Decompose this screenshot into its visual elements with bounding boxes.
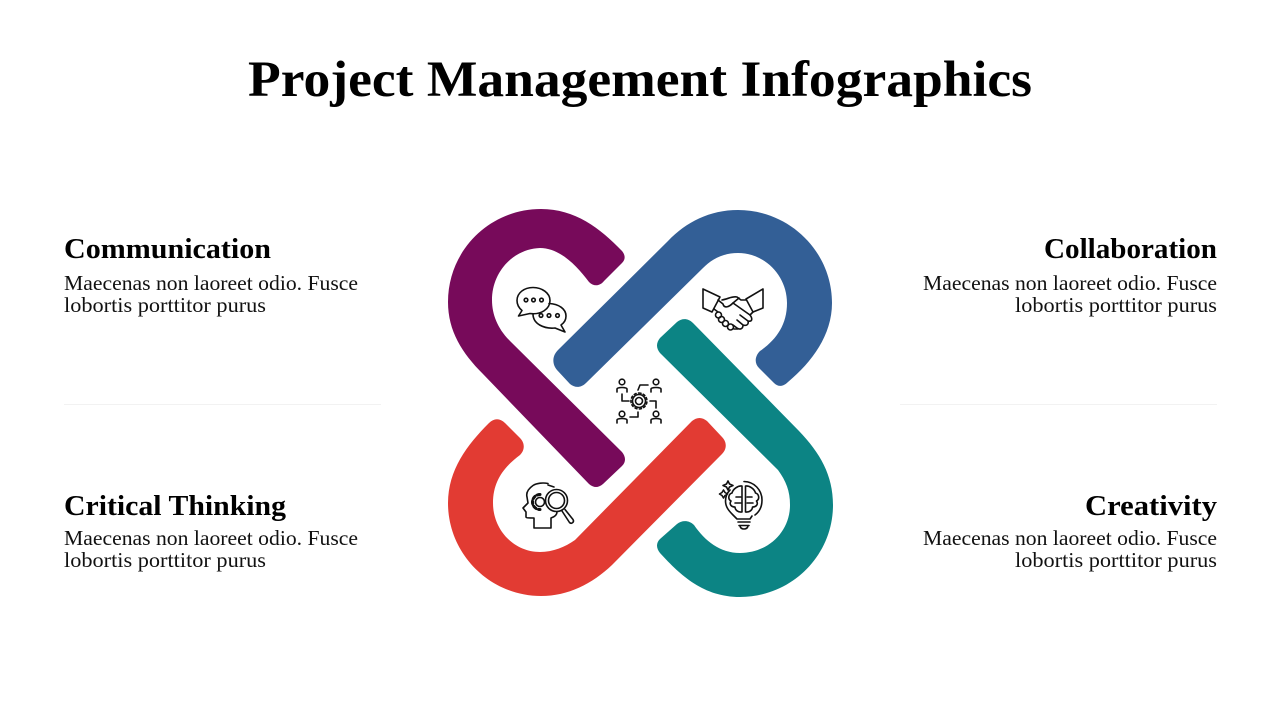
panel: critical thinking text [64, 491, 358, 572]
panel: communication text [64, 234, 358, 317]
heading: collaboration: Collaboration [1044, 234, 1217, 265]
text: creativity body: lobortis porttitor purus [1015, 548, 1217, 572]
heading: critical thinking: Critical Thinking [64, 491, 286, 522]
text: collaboration body: Maecenas non laoreet odio. Fusce [923, 271, 1217, 295]
knot: red link [448, 418, 726, 596]
panel: collaboration text [923, 234, 1217, 317]
icon: head with gear and magnifier [523, 483, 573, 528]
icon: chat bubbles [517, 288, 566, 332]
knot: purple link [448, 209, 625, 487]
text: critical thinking body [64, 526, 358, 572]
text: collaboration body: lobortis porttitor purus [1015, 293, 1217, 317]
panel: creativity text [923, 491, 1217, 572]
knot: blue link [553, 210, 832, 387]
text: communication body [64, 271, 358, 317]
text: collaboration body [923, 271, 1217, 317]
text: critical thinking body: lobortis porttitor purus [64, 548, 266, 572]
text: creativity body: Maecenas non laoreet odio. Fusce [923, 526, 1217, 550]
text: communication body: Maecenas non laoreet odio. Fusce [64, 271, 358, 295]
icon: brain light bulb [720, 481, 762, 529]
knot: teal link [657, 319, 833, 597]
text: communication body: lobortis porttitor purus [64, 293, 266, 317]
text: creativity body [923, 526, 1217, 572]
icon: handshake [703, 289, 763, 330]
heading: creativity: Creativity [1085, 491, 1217, 522]
text: critical thinking body: Maecenas non laoreet odio. Fusce [64, 526, 358, 550]
heading: communication: Communication [64, 234, 271, 265]
icon: central team gear [617, 379, 661, 423]
title: Project Management Infographics [248, 52, 1032, 108]
